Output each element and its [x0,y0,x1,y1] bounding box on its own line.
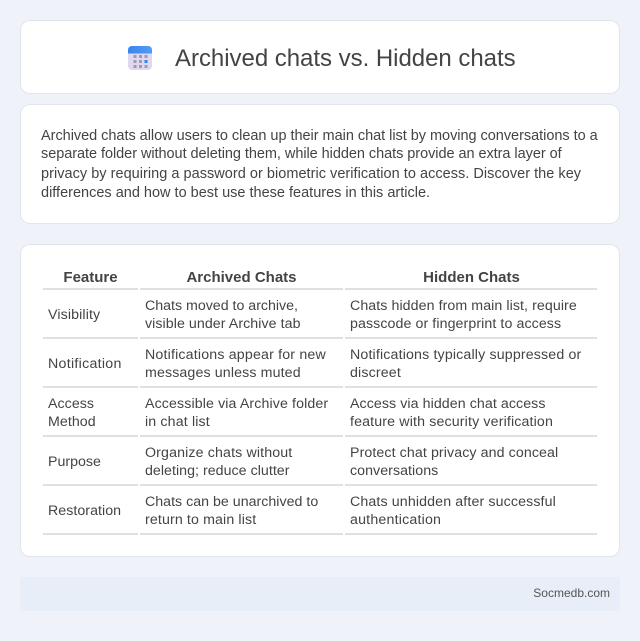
comparison table: passcode or fingerprint to access [350,316,561,332]
comparison table: Access via hidden chat access [350,396,546,412]
comparison table: Feature [63,269,118,286]
comparison table: discreet [350,365,401,381]
footer source text: Socmedb.com [533,586,610,600]
comparison table: Notifications appear for new [145,347,326,363]
intro text [41,128,598,200]
comparison table: Organize chats without [145,445,292,461]
comparison table: visible under Archive tab [145,316,301,332]
comparison table: in chat list [145,414,210,430]
comparison table: Protect chat privacy and conceal [350,445,558,461]
comparison table: Access [48,396,94,412]
comparison table: Restoration [48,503,121,519]
comparison table: Method [48,414,96,430]
comparison table: Chats can be unarchived to [145,494,318,510]
comparison table: Visibility [48,307,100,323]
comparison table [43,269,597,535]
intro text: privacy by requiring a password or biometric verification to access. Discover the key [41,166,581,182]
intro text: separate folder without deleting them, while hidden chats provide an extra layer of [41,146,562,162]
intro text: differences and how to best use these features in this article. [41,184,430,200]
intro panel [20,104,620,224]
comparison table: conversations [350,463,438,479]
comparison table: authentication [350,512,441,528]
comparison table: Chats moved to archive, [145,298,298,314]
icon: calendar [128,46,152,70]
table panel [20,244,620,557]
comparison table: Chats unhidden after successful [350,494,556,510]
comparison table: Notifications typically suppressed or [350,347,581,363]
footer bar [20,577,620,611]
comparison table: return to main list [145,512,256,528]
comparison table: Hidden Chats [423,269,520,286]
header panel [20,20,620,94]
title: Archived chats vs. Hidden chats [175,45,516,72]
comparison table: messages unless muted [145,365,301,381]
comparison table: feature with security verification [350,414,553,430]
comparison table: Chats hidden from main list, require [350,298,577,314]
comparison table: Purpose [48,454,101,470]
comparison table: deleting; reduce clutter [145,463,290,479]
comparison table: Archived Chats [186,269,297,286]
comparison table: Accessible via Archive folder [145,396,328,412]
intro text: Archived chats allow users to clean up their main chat list by moving conversations to a [41,128,598,144]
comparison table: Notification [48,356,122,372]
